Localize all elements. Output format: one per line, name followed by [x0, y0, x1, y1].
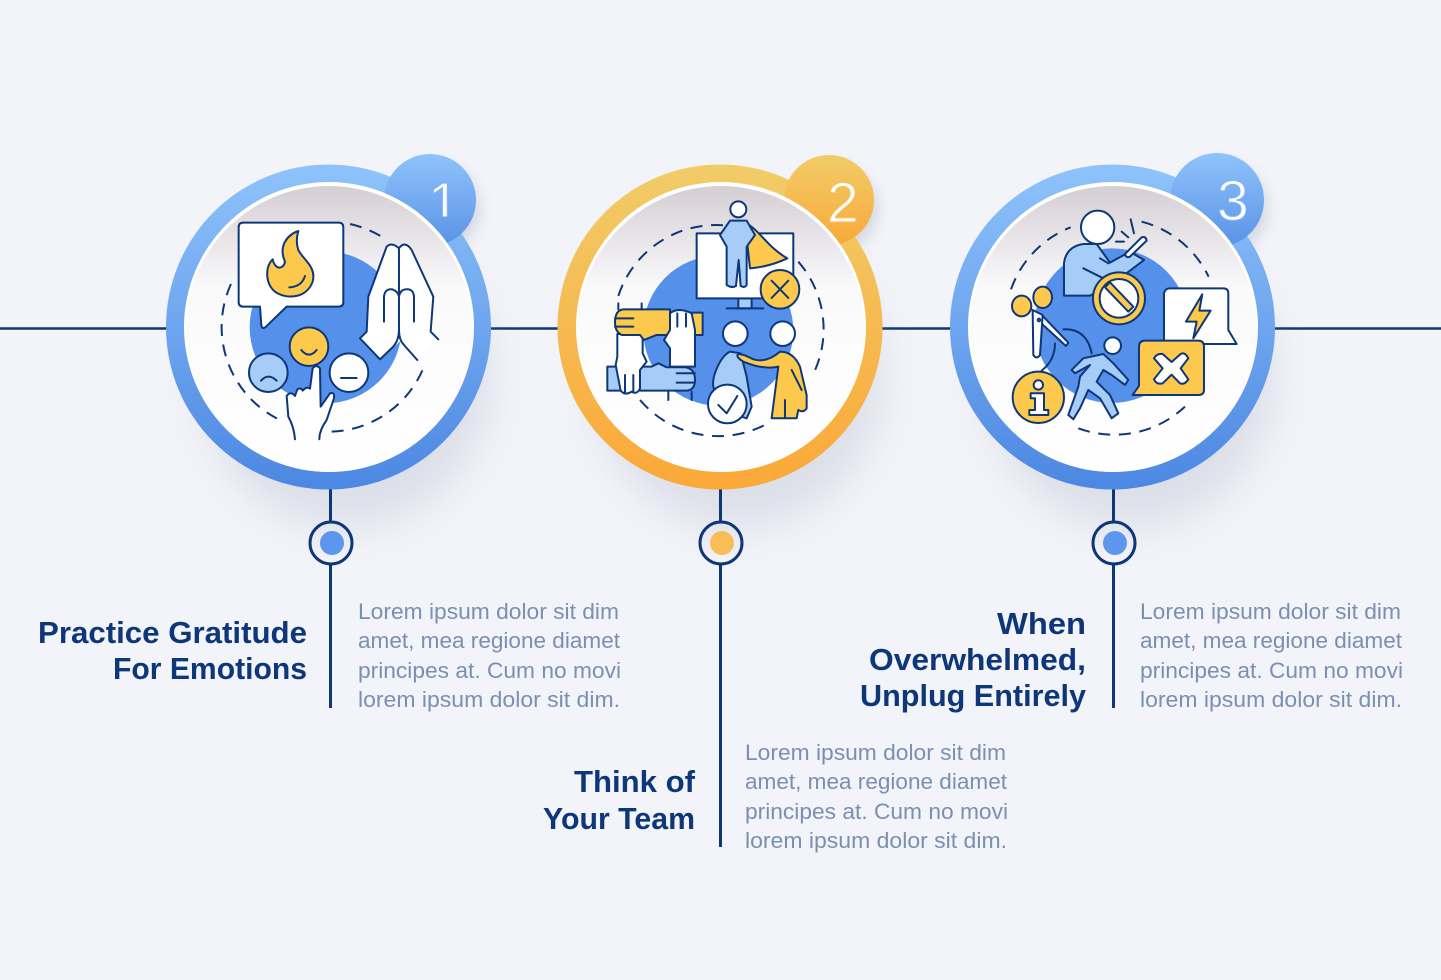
- text block: step 2 body: lorem ipsum dolor sit dim.: [745, 828, 1007, 853]
- connector and node 3: [1093, 486, 1135, 708]
- praying hands: [360, 245, 438, 360]
- connector and node 2: [700, 486, 742, 847]
- badge 1: [384, 154, 476, 246]
- text block: step 2 heading: Think of: [574, 764, 696, 799]
- badge 3: [1170, 153, 1264, 247]
- four interlocked hands: [607, 303, 703, 400]
- text block: step 1 heading: For Emotions: [113, 651, 307, 686]
- scissors and cable: [1012, 287, 1092, 371]
- text block: step 2 heading: [543, 764, 696, 836]
- text block: step 3 body: amet, mea regione diamet: [1140, 628, 1403, 653]
- text block: step 3 heading: Overwhelmed,: [869, 642, 1086, 677]
- text block: step 3 body: lorem ipsum dolor sit dim.: [1140, 687, 1402, 712]
- text block: step 1 body: lorem ipsum dolor sit dim.: [358, 687, 620, 712]
- text block: step 2 body: Lorem ipsum dolor sit dim: [745, 740, 1006, 765]
- speech bubble with lightning: [1164, 288, 1237, 344]
- number 2: 2: [827, 171, 859, 235]
- text block: step 1 heading: Practice Gratitude: [38, 615, 307, 650]
- info circle: [1013, 372, 1064, 423]
- panel: step 3 circle: [950, 153, 1275, 708]
- horizontal timeline: [0, 327, 1441, 330]
- monitor with superhero: [697, 201, 793, 308]
- icon: unplug: [1011, 211, 1237, 435]
- text block: step 2 body: principes at. Cum no movi: [745, 799, 1008, 824]
- text block: step 2 heading: Your Team: [543, 801, 695, 836]
- panel: step 1 circle: [166, 154, 491, 708]
- text block: step 2 body: [745, 740, 1008, 853]
- icon: team: [607, 201, 824, 436]
- panel: step 2 circle: [558, 155, 883, 847]
- text block: step 3 body: [1140, 599, 1403, 712]
- person smashing phone: [1064, 211, 1147, 296]
- running person: [1068, 337, 1128, 419]
- text block: step 1 heading: [38, 615, 307, 686]
- text block: step 3 body: principes at. Cum no movi: [1140, 658, 1403, 683]
- text block: step 3 heading: Unplug Entirely: [860, 678, 1087, 713]
- text block: step 3 heading: [860, 606, 1087, 713]
- text block: step 1 body: Lorem ipsum dolor sit dim: [358, 599, 619, 624]
- speech bubble with x: [1133, 341, 1204, 395]
- number 3: 3: [1217, 169, 1249, 233]
- infographic canvas: [0, 153, 1441, 852]
- text block: step 3 heading: When: [997, 606, 1086, 641]
- icon: gratitude and emotions: [222, 223, 438, 439]
- text block: step 1 body: amet, mea regione diamet: [358, 628, 621, 653]
- pointing hand: [287, 366, 334, 439]
- emotion faces: [249, 327, 368, 392]
- prohibition sign: [1093, 272, 1145, 324]
- speech bubble with flame: [239, 223, 343, 328]
- badge 2: [784, 155, 874, 245]
- text block: step 1 body: principes at. Cum no movi: [358, 658, 621, 683]
- x mark circle: [761, 270, 799, 309]
- two colleagues: [708, 321, 807, 423]
- text block: step 3 body: Lorem ipsum dolor sit dim: [1140, 599, 1401, 624]
- connector and node 1: [310, 486, 352, 708]
- text block: step 1 body: [358, 599, 621, 712]
- number 1: 1: [428, 171, 460, 235]
- text block: step 2 body: amet, mea regione diamet: [745, 769, 1008, 794]
